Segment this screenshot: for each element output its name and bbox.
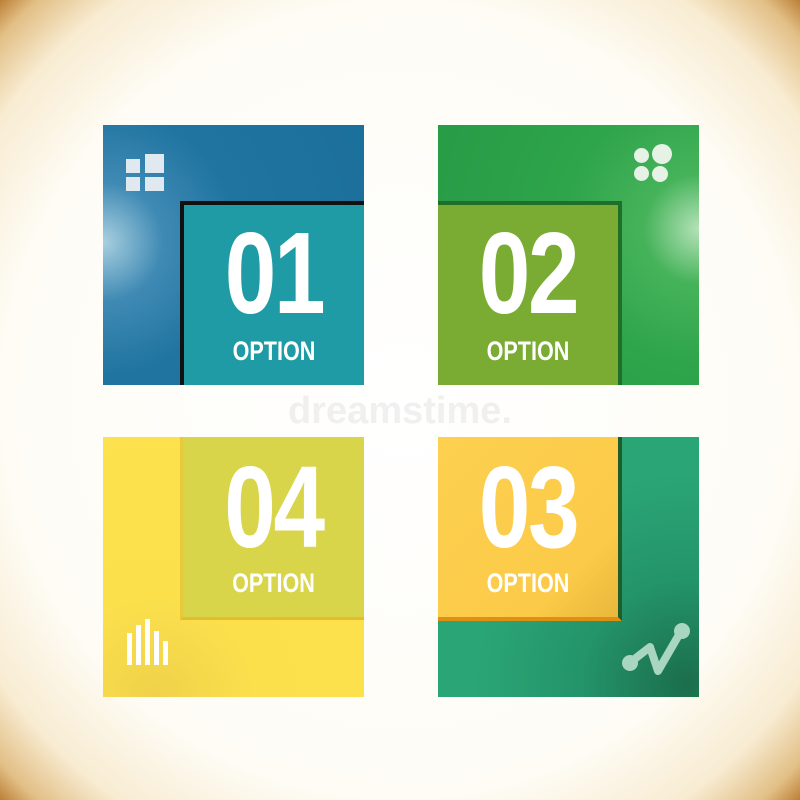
number 03: 03 — [479, 442, 577, 572]
inner box 04 — [180, 437, 364, 620]
watermark: dreamstime. — [288, 390, 512, 432]
number 02: 02 — [479, 208, 577, 338]
icon: line chart — [622, 623, 690, 675]
inner box 01 — [180, 201, 364, 385]
panel: 02 — [438, 125, 699, 385]
inner box 02 — [438, 201, 622, 385]
panel: 03 — [438, 437, 699, 697]
icon: bar chart — [127, 619, 168, 665]
label option: OPTION — [232, 568, 315, 598]
icon: grid squares — [126, 154, 164, 191]
panel: 04 — [103, 437, 364, 697]
label option: OPTION — [487, 568, 569, 598]
label option: OPTION — [233, 336, 315, 366]
icon: four dots — [634, 144, 672, 182]
label option: OPTION — [487, 336, 569, 366]
number 04: 04 — [224, 442, 323, 572]
number 01: 01 — [225, 208, 323, 338]
inner box 03 — [438, 437, 622, 621]
panel: 01 — [103, 125, 364, 385]
